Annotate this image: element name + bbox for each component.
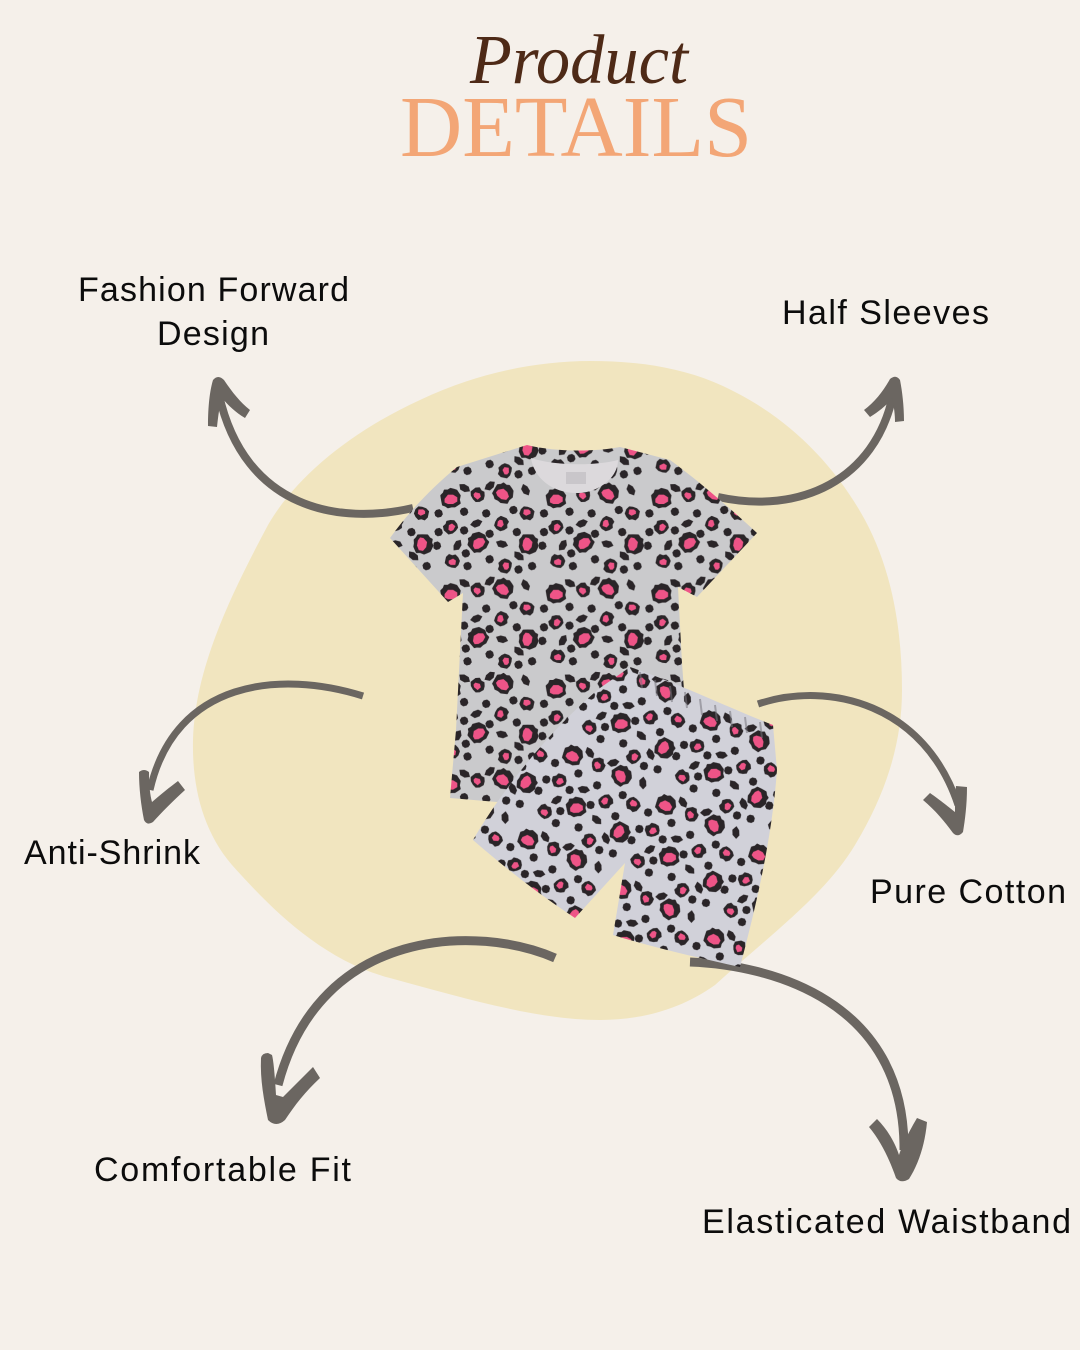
t-shirt (390, 445, 757, 802)
shorts (473, 667, 777, 967)
label: Half Sleeves: Half Sleeves (782, 294, 989, 332)
label: Comfortable Fit: Comfortable Fit (94, 1151, 352, 1189)
title line: Product: Product (469, 22, 690, 99)
arrow: elasticated waistband (690, 962, 927, 1181)
label: Fashion Forward Design (78, 271, 349, 353)
title line: DETAILS: DETAILS (400, 78, 752, 175)
arrow: anti-shrink (139, 684, 363, 824)
label: Anti-Shrink: Anti-Shrink (24, 834, 201, 872)
label: Pure Cotton: Pure Cotton (870, 873, 1066, 911)
title (400, 22, 752, 175)
label: Elasticated Waistband: Elasticated Waistband (702, 1203, 1071, 1241)
label: Fashion Forward Design: Design (157, 315, 269, 353)
arrow: half sleeves (718, 377, 904, 502)
arrow: comfortable fit (261, 941, 555, 1124)
background blob (193, 361, 902, 1020)
product photo: leopard print pyjama set (390, 445, 777, 967)
arrow: fashion forward design (208, 377, 413, 514)
label: Fashion Forward Design: Fashion Forward (78, 271, 349, 309)
arrow: pure cotton (758, 696, 967, 835)
